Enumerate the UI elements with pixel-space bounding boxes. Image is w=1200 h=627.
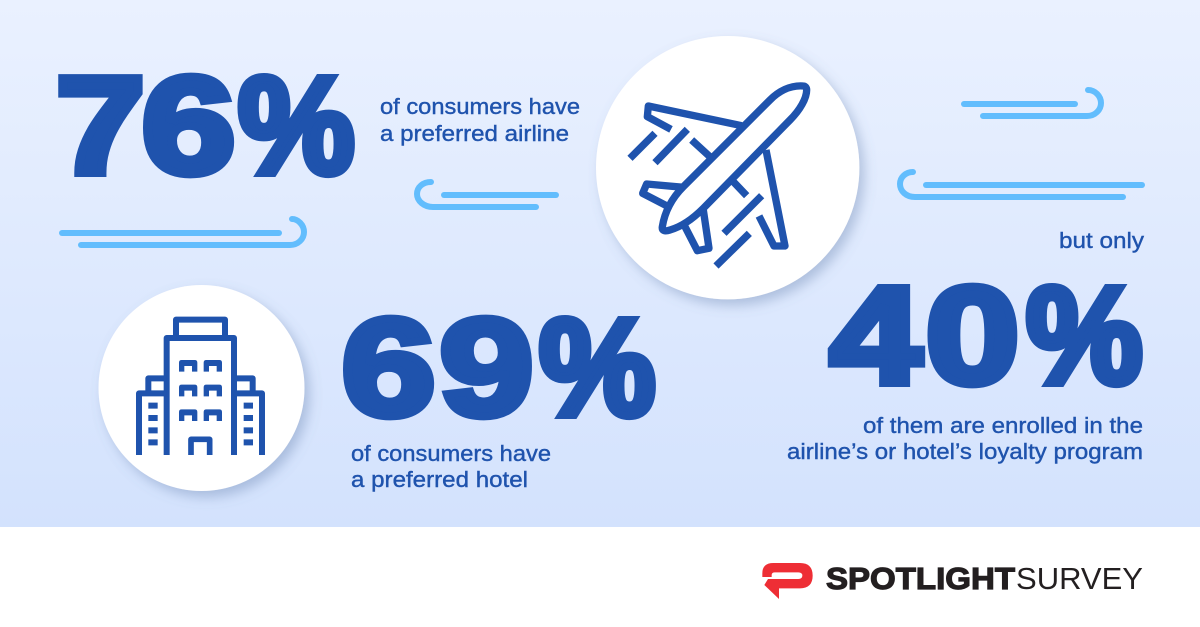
text: loyalty program: airline’s or hotel’s loyalty program	[787, 439, 1143, 464]
logo wordmark	[826, 561, 1143, 596]
logo wordmark: SURVEY	[1016, 561, 1143, 596]
footer panel	[0, 527, 1200, 627]
text: preferred airline	[380, 94, 580, 146]
text: preferred hotel: of consumers have	[351, 441, 551, 466]
stat: 40%: 4	[830, 259, 921, 413]
stat: 40%: 0	[926, 258, 1019, 413]
text: loyalty program	[787, 413, 1143, 464]
stat: 76%: 6	[142, 48, 235, 203]
stat: 76%	[56, 48, 355, 203]
stat: 40%	[830, 258, 1143, 413]
stat: 69%: %	[539, 290, 656, 445]
logo wordmark: SPOTLIGHT	[826, 561, 1015, 596]
text: but only: but only	[1059, 228, 1144, 253]
wind lines: top right	[964, 90, 1101, 116]
windows	[148, 360, 253, 445]
text: loyalty program: of them are enrolled in the	[863, 413, 1143, 438]
text: preferred hotel	[351, 441, 551, 492]
wind lines: centre	[417, 182, 556, 207]
stat: 69%	[342, 290, 656, 445]
text: preferred airline: a preferred airline	[380, 121, 569, 146]
wind lines: lower left	[62, 219, 304, 245]
stat: 76%: %	[238, 48, 355, 203]
icon: hotel building in circle	[98, 285, 304, 491]
text: preferred hotel: a preferred hotel	[351, 467, 528, 492]
text: preferred airline: of consumers have	[380, 94, 580, 119]
logo: spotlight survey	[762, 561, 1143, 599]
icon: airplane in circle	[596, 36, 859, 299]
stat: 69%: 9	[440, 290, 533, 445]
stat: 69%: 6	[342, 290, 435, 445]
stat: 76%: 7	[56, 48, 145, 203]
wind lines: right	[900, 172, 1142, 197]
stat: 40%: %	[1026, 258, 1143, 413]
logo icon	[762, 563, 813, 599]
